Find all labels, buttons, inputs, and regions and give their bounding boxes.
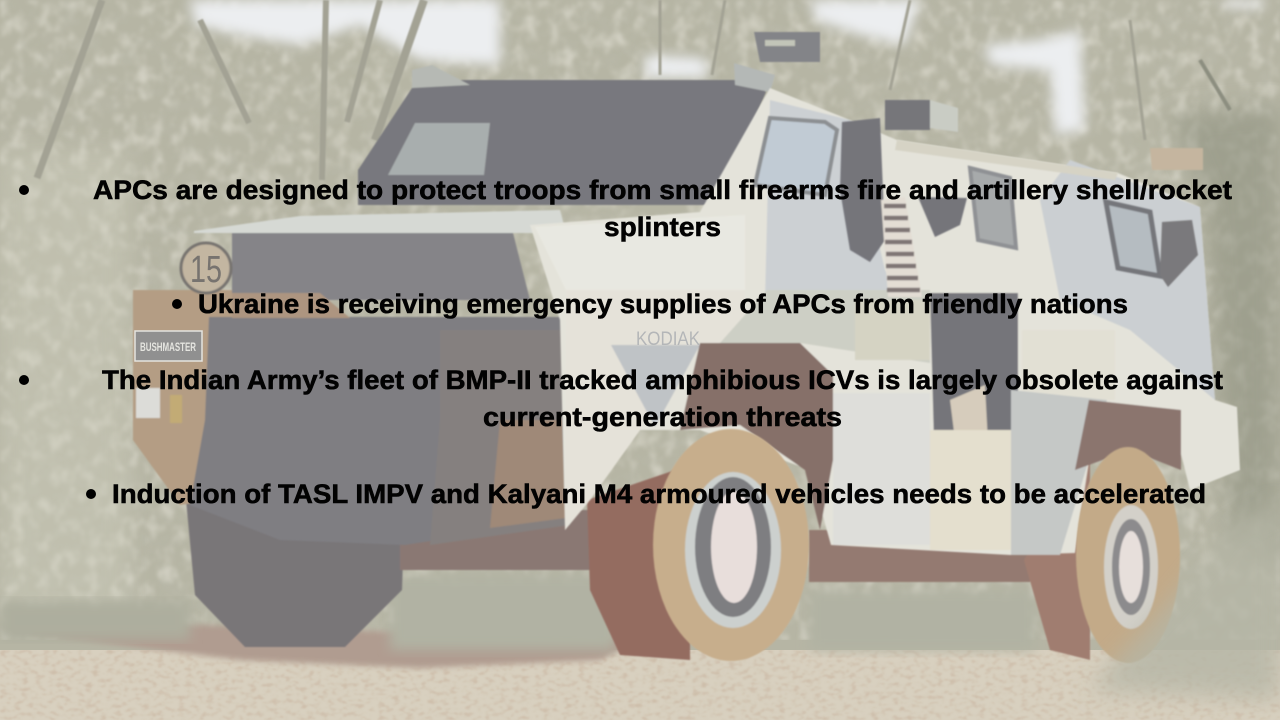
vehicle: main camouflage body: [530, 88, 1240, 555]
bullet 1: troop protection: [19, 175, 1232, 242]
vehicle: front wheels: [653, 429, 1180, 663]
vehicle: cab windscreen: [358, 63, 775, 205]
vehicle: Kodiak name: KODIAK: [636, 329, 700, 350]
lighter lower-left bush: [0, 150, 130, 620]
bullet 1: troop protection: splinters: [604, 212, 721, 242]
undergrowth behind wheels: [390, 575, 1035, 650]
blue camo panel and rear arch: [1011, 390, 1107, 555]
front fender and blue camo: [565, 290, 745, 530]
foreground grass: [1090, 500, 1280, 700]
bullet 2: Ukraine supplies: Ukraine is receiving emergency supplies of APCs from friendly nations: [198, 289, 1128, 319]
central dark bay: [930, 293, 1018, 480]
bullet list: [19, 175, 1232, 509]
tree trunks: [37, 0, 1230, 180]
vehicle: Bushmaster badge: [135, 331, 202, 361]
wheel arch: [680, 343, 833, 530]
vehicle: rear hull: [133, 210, 570, 545]
olive storage doors: [720, 290, 930, 363]
vehicle: Bushmaster badge: BUSHMASTER: [140, 340, 196, 354]
bullet 4: accelerate induction: Induction of TASL IMPV and Kalyani M4 armoured vehicles needs to be accelerated: [112, 479, 1206, 509]
vehicle: windows, spare wheel and stowage: [754, 32, 1203, 297]
bullet 1: troop protection: APCs are designed to protect troops from small firearms fire and artillery shell/rocket: [93, 175, 1232, 205]
white doors: [833, 393, 930, 545]
ground: [0, 575, 1280, 720]
bullet 3: Indian Army fleet: The Indian Army’s fleet of BMP-II tracked amphibious ICVs is largely obsolete against: [102, 365, 1223, 395]
vehicle: underbody and rear wheel: [186, 460, 1090, 660]
bullet 3: Indian Army fleet: [19, 365, 1223, 432]
vehicle: number 15 plate: 15: [190, 249, 222, 291]
bullet 3: Indian Army fleet: current-generation threats: [483, 402, 842, 432]
sky gaps: [190, 0, 1264, 135]
darker tree masses: [1170, 105, 1280, 560]
